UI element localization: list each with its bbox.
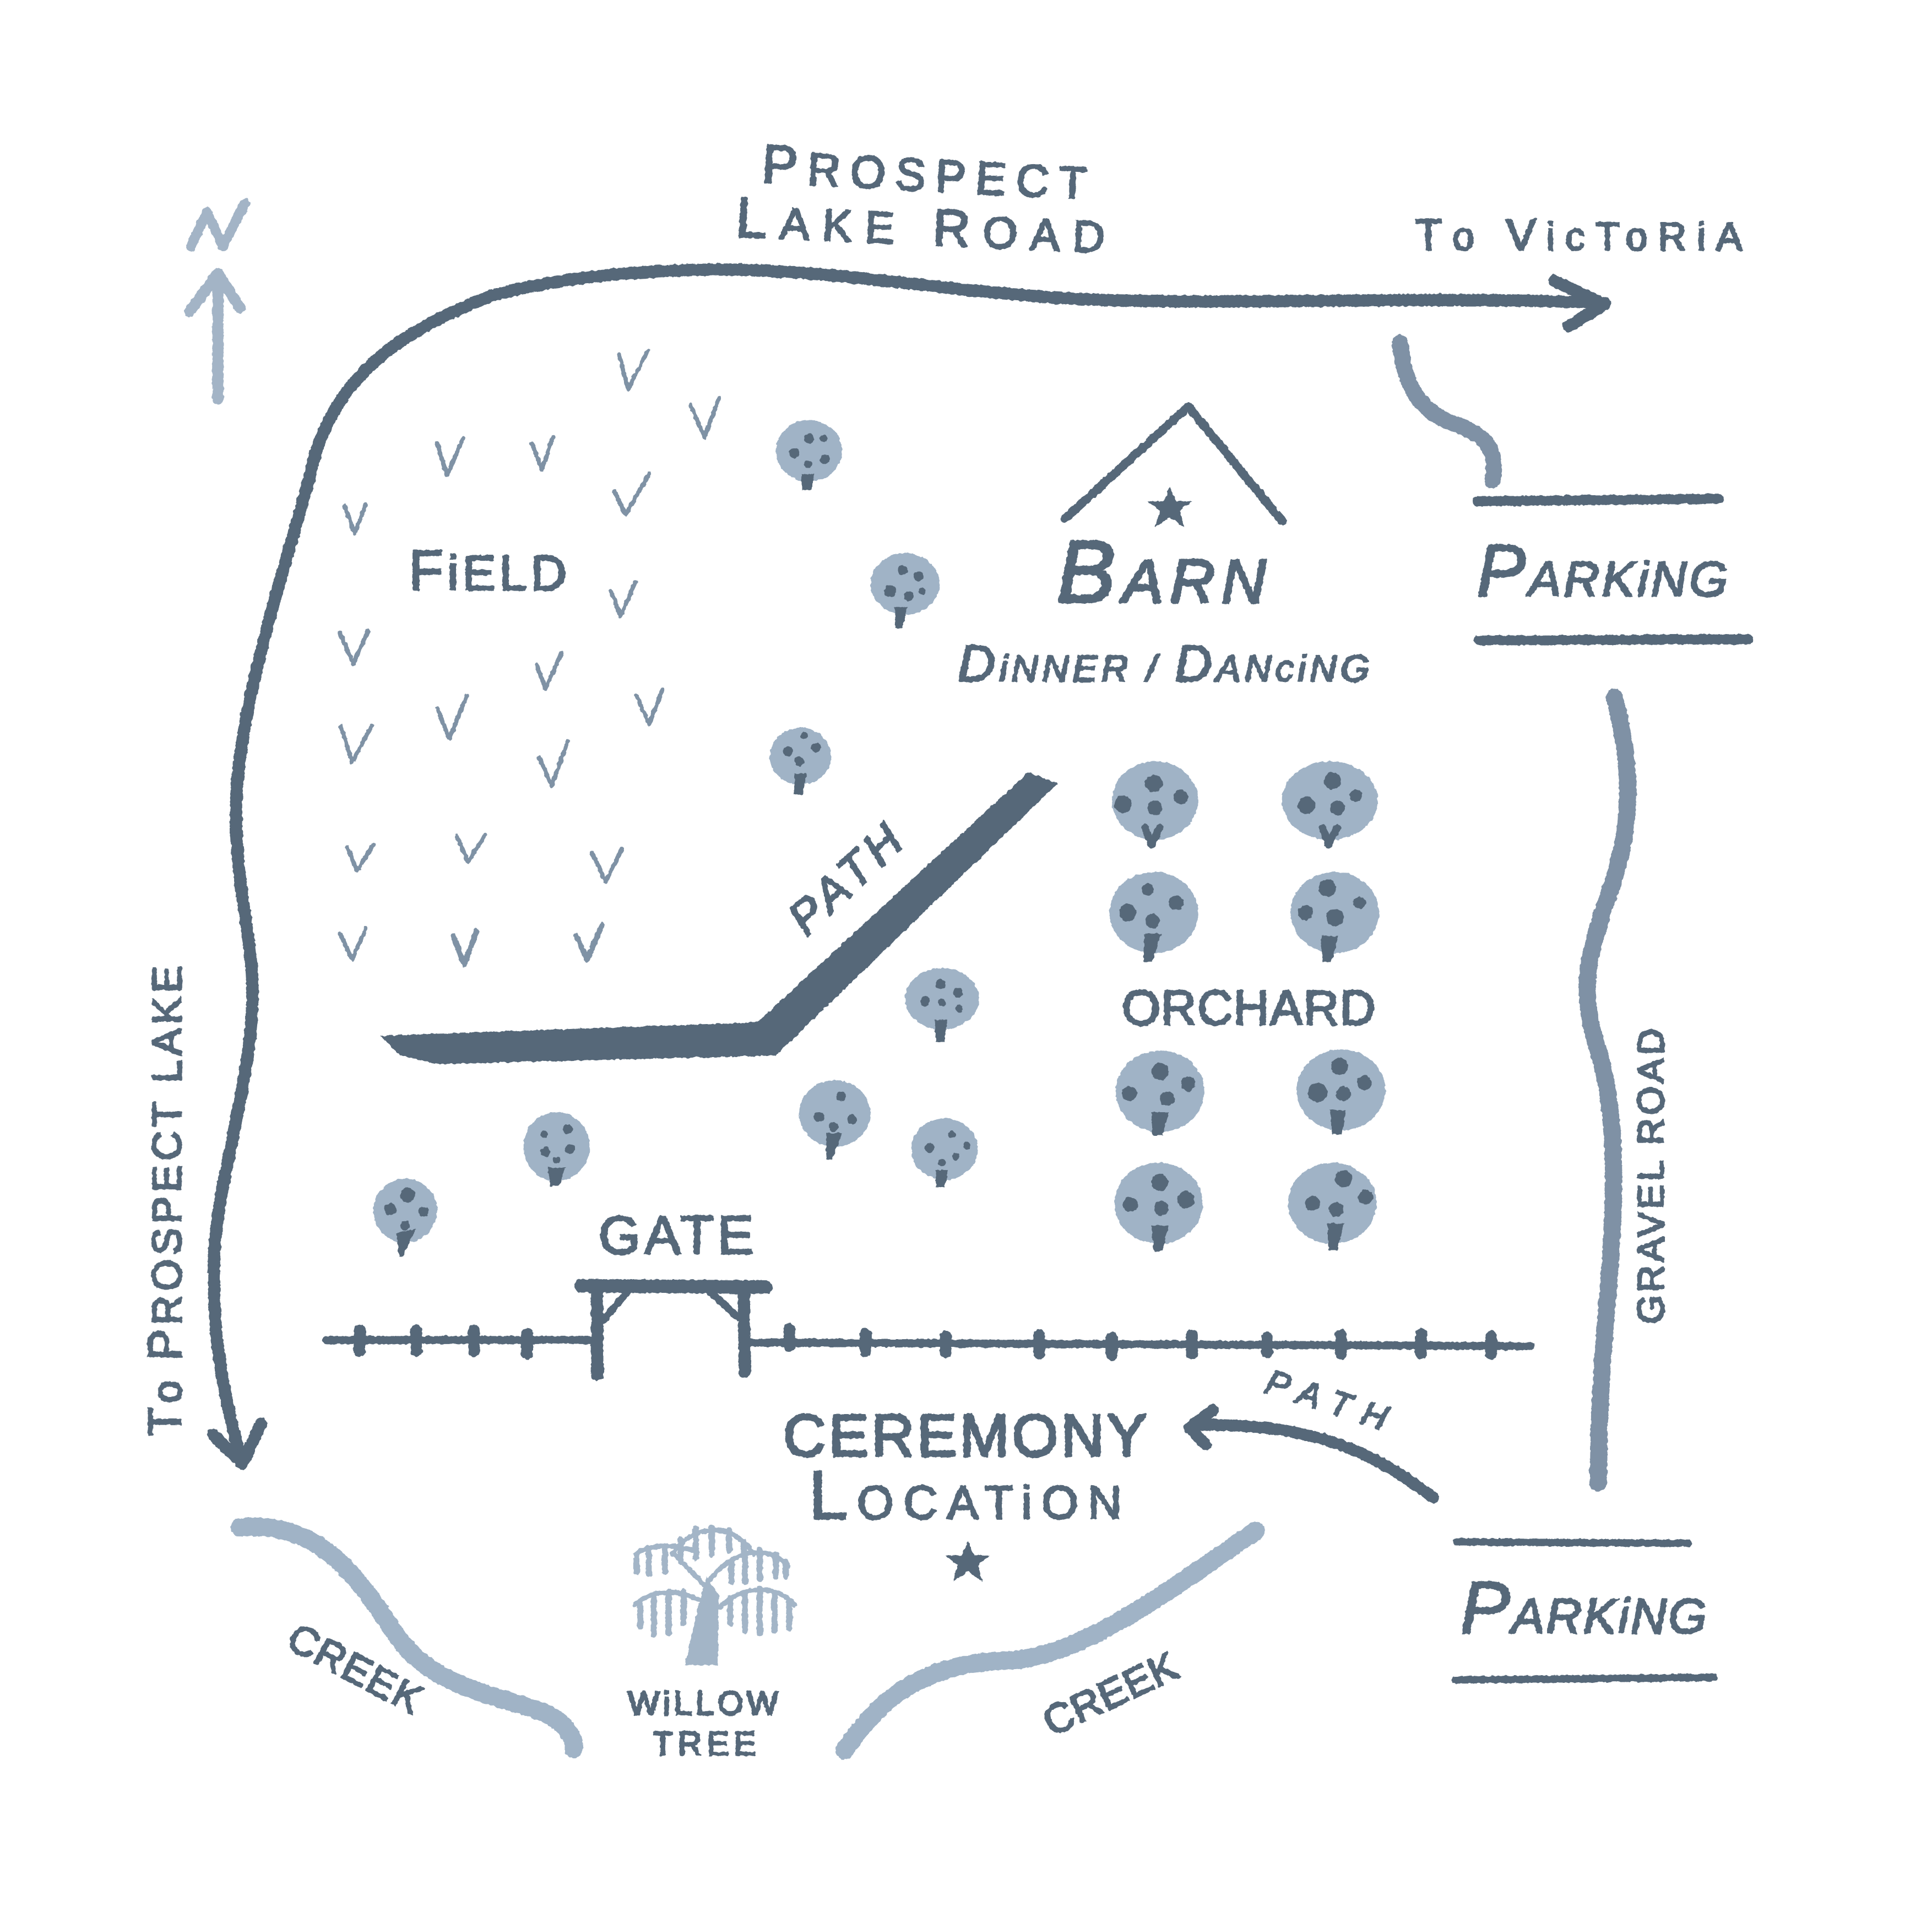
trees: scattered: [373, 420, 979, 1257]
icon: willow tree: [636, 1527, 794, 1665]
title: Prospect Lake Road: P ROSPECT: [761, 133, 1088, 211]
gravel road: [1587, 697, 1672, 1483]
orchard trees: [1109, 761, 1385, 1252]
gravel road: GRAVEL ROAD: [1631, 1028, 1672, 1324]
label: Ceremony Location: CEREMONY: [783, 1402, 1147, 1469]
icon: star: [946, 1541, 990, 1582]
label: To Prospect Lake: To PROSPECT LAKE: [139, 966, 192, 1436]
path: wide track: PATH: [778, 814, 913, 945]
fence and gate: [326, 1286, 1531, 1374]
path: wide track: [381, 772, 1058, 1064]
title: Prospect Lake Road: [735, 133, 1106, 265]
label: Orchard: ORCHARD: [1122, 980, 1375, 1035]
label: Ceremony Location: [783, 1402, 1147, 1534]
lower parking: [1456, 1542, 1714, 1680]
road to upper parking: [1400, 343, 1494, 480]
map artwork: [139, 133, 1749, 1762]
grass marks: [340, 351, 719, 965]
title: Prospect Lake Road: L AKE R OAD: [735, 185, 1106, 265]
label: Barn: BARN: [1056, 522, 1266, 621]
upper parking: PARKiNG: [1477, 530, 1728, 612]
creek left: [240, 1527, 574, 1749]
label: Willow Tree: WiLLOW: [628, 1684, 778, 1721]
label: To Victoria: T o V icToRiA: [1415, 210, 1743, 260]
label: Willow Tree: [628, 1684, 778, 1762]
icon: north arrow: [189, 203, 245, 399]
path arrow to ceremony: PATH: [1261, 1362, 1393, 1438]
label: Field: FiELD: [409, 539, 566, 602]
label: Ceremony Location: L OCATiON: [809, 1456, 1122, 1534]
arrow: main road: [213, 269, 1604, 1463]
label: Gate: GATE: [599, 1205, 753, 1265]
creek right: CREEK: [1036, 1643, 1185, 1745]
upper parking: [1477, 499, 1749, 641]
path arrow to ceremony: [1190, 1362, 1433, 1498]
creek right: [845, 1531, 1256, 1750]
creek left: CREEK: [280, 1614, 430, 1723]
lower parking: PARKiNG: [1461, 1567, 1707, 1649]
label: Dinner / Dancing: DiNNER / DANciNG: [958, 634, 1369, 692]
label: Willow Tree: TREE: [653, 1725, 756, 1762]
icon: barn: [1065, 407, 1282, 527]
